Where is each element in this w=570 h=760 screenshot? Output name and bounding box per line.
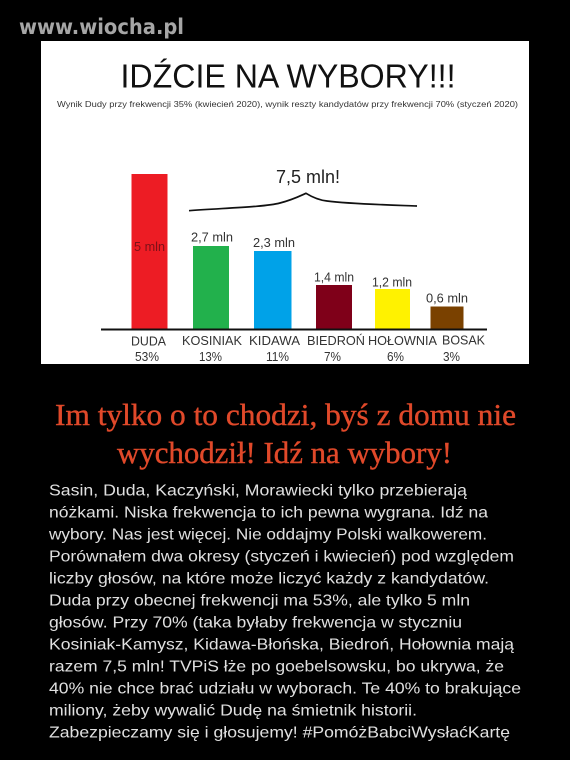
bar: Duda: 5 mln — [134, 240, 165, 254]
bar: Duda — [131, 174, 168, 364]
bar: Hołownia: HOŁOWNIA — [368, 334, 438, 348]
body text: Zabezpieczamy się i głosujemy! #PomóżBabciWysłaćKartę — [49, 724, 510, 742]
body text: razem 7,5 mln! TVPiS łże po goebelsowsku, bo ukrywa, że — [49, 658, 504, 676]
body text: 40% nie chce brać udziału w wyborach. Te 40% to brakujące — [49, 680, 521, 698]
body text: nóżkami. Niska frekwencja to ich pewna wygrana. Idź na — [49, 504, 488, 522]
axis line — [101, 328, 487, 330]
bar: Hołownia: 6% — [387, 350, 404, 364]
body text — [48, 482, 521, 742]
bar: Duda: DUDA — [131, 334, 167, 348]
body text: Duda przy obecnej frekwencji ma 53%, ale tylko 5 mln — [49, 592, 470, 610]
bar: Bosak: 3% — [443, 350, 460, 364]
body text: głosów. Przy 70% (taka byłaby frekwencja w styczniu — [49, 614, 462, 632]
bar: Kidawa: 2,3 mln — [253, 235, 295, 250]
heading: Im tylko o to chodzi, byś z domu nie — [55, 397, 516, 432]
watermark: www.wiocha.pl: www.wiocha.pl — [19, 15, 184, 39]
bracket curve — [189, 193, 417, 211]
title: IDŹCIE NA WYBORY!!! — [120, 58, 456, 94]
bar: Kosiniak: KOSINIAK — [182, 334, 243, 348]
bar: Kidawa: 11% — [266, 350, 289, 364]
bar: Bosak — [426, 290, 486, 364]
bar: Biedroń: 1,4 mln — [314, 270, 354, 284]
bar: Kosiniak: 2,7 mln — [191, 230, 233, 244]
bar: Bosak: 0,6 mln — [426, 290, 468, 306]
bar: Biedroń: BIEDROŃ — [307, 333, 365, 348]
bar: Hołownia — [368, 274, 438, 364]
body text: miliony, żeby wywalić Dudę na śmietnik historii. — [49, 702, 417, 720]
body text: Sasin, Duda, Kaczyński, Morawiecki tylko przebierają — [49, 482, 467, 500]
bar: Duda: 53% — [135, 350, 159, 364]
bracket label: 7,5 mln!: 7,5 mln! — [276, 167, 340, 187]
bar: Biedroń: 7% — [324, 350, 341, 364]
body text: liczby głosów, na które może liczyć każdy z kandydatów. — [49, 570, 489, 588]
body text: Kosiniak-Kamysz, Kidawa-Błońska, Biedroń, Hołownia mają — [49, 636, 514, 654]
subtitle: Wynik Dudy przy frekwencji 35% (kwiecień 2020), wynik reszty kandydatów przy frekwencji 70% (styczeń 2020) — [57, 99, 518, 109]
bar: Biedroń — [307, 270, 365, 364]
bar: Kidawa — [249, 235, 301, 364]
bar: Kosiniak: 13% — [199, 350, 222, 364]
bar: Kosiniak — [182, 230, 243, 364]
body text: Porównałem dwa okresy (styczeń i kwiecień) pod względem — [49, 548, 514, 566]
heading: wychodził! Idź na wybory! — [117, 435, 452, 470]
bar: Kidawa: KIDAWA — [249, 334, 301, 348]
bar: Bosak: BOSAK — [442, 334, 486, 348]
body text: wybory. Nas jest więcej. Nie oddajmy Polski walkowerem. — [48, 526, 487, 544]
heading — [55, 397, 516, 470]
bar: Hołownia: 1,2 mln — [372, 274, 412, 290]
panel: chart — [41, 41, 529, 364]
